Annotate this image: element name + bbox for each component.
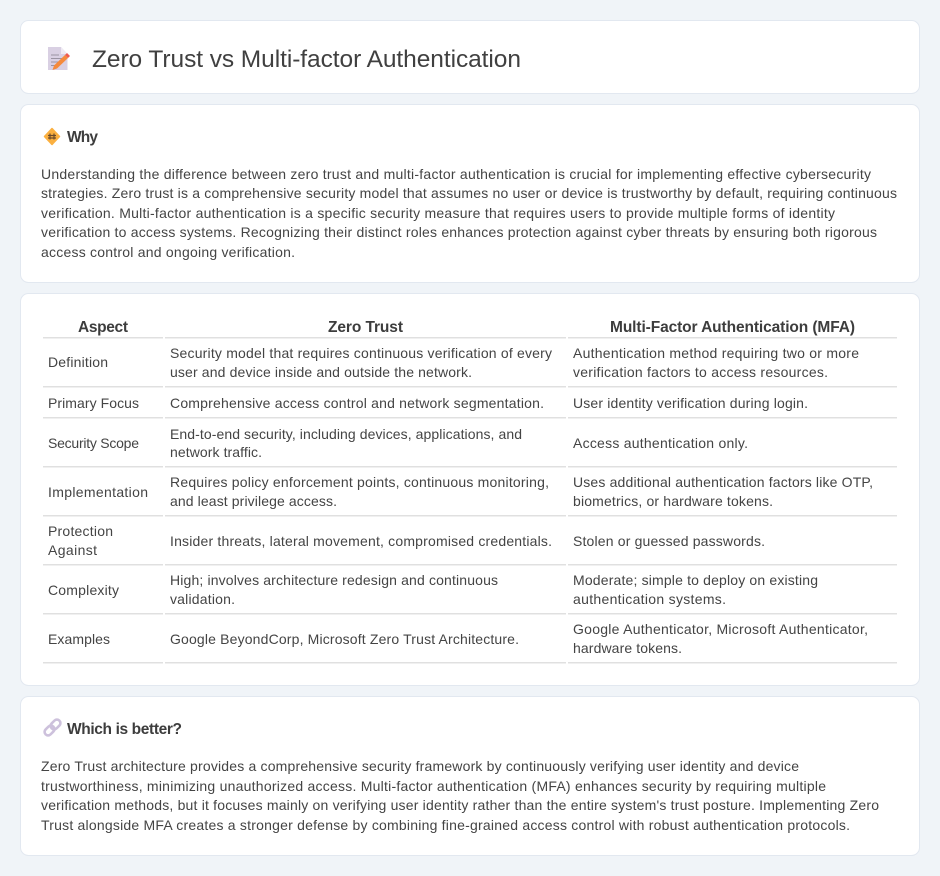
- row: definition: Security model that requires continuous verification of every: [170, 345, 552, 361]
- text block: which is better paragraph: [41, 758, 879, 833]
- row: implementation: [48, 474, 873, 509]
- text block: why paragraph: verification. Multi-factor authentication is a specific security measure that requires users to provide multiple forms of identity: [41, 205, 835, 221]
- row: primary focus: User identity verification during login.: [573, 395, 808, 411]
- row: examples: [48, 621, 868, 656]
- row: implementation: Requires policy enforcement points, continuous monitoring,: [170, 474, 549, 490]
- panel: why: [20, 104, 920, 282]
- table header row: Multi-Factor Authentication (MFA): [610, 319, 855, 336]
- row: protection against: Protection: [48, 523, 113, 539]
- icon: chain link: [43, 718, 62, 737]
- text block: why paragraph: Understanding the difference between zero trust and multi-factor authentication is crucial for implementing effective cybersecurity: [41, 166, 871, 182]
- row: complexity: High; involves architecture redesign and continuous: [170, 572, 498, 588]
- row: examples: Google Authenticator, Microsoft Authenticator,: [573, 621, 868, 637]
- row: protection against: Insider threats, lateral movement, compromised credentials.: [170, 533, 552, 549]
- row: primary focus: Primary Focus: [48, 395, 139, 411]
- table header row: Zero Trust: [328, 319, 403, 336]
- row: security scope: [48, 426, 748, 460]
- row: examples: Examples: [48, 631, 110, 647]
- row: examples: hardware tokens.: [573, 640, 682, 656]
- text block: why paragraph: [41, 166, 897, 260]
- row: definition: Definition: [48, 354, 108, 370]
- title: Zero Trust vs Multi-factor Authentication: [92, 46, 521, 73]
- text block: which is better paragraph: Zero Trust architecture provides a comprehensive security framework by continuously verifying user identity and device: [41, 758, 799, 774]
- row: complexity: validation.: [170, 591, 235, 607]
- row: examples: Google BeyondCorp, Microsoft Zero Trust Architecture.: [170, 631, 519, 647]
- heading: why: Why: [67, 129, 98, 146]
- row: definition: user and device inside and outside the network.: [170, 364, 472, 380]
- row: security scope: Access authentication only.: [573, 435, 748, 451]
- row: definition: Authentication method requiring two or more: [573, 345, 859, 361]
- heading: which is better: Which is better?: [67, 721, 182, 738]
- text block: which is better paragraph: verification methods, but it focuses mainly on verifying user identity rather than the entire system's trust posture. Implementing Zero: [41, 797, 879, 813]
- row: security scope: End-to-end security, including devices, applications, and: [170, 426, 522, 442]
- row: complexity: Moderate; simple to deploy on existing: [573, 572, 818, 588]
- panel: which is better: [20, 696, 920, 856]
- row: complexity: [48, 572, 818, 607]
- table header row: Aspect: [78, 319, 128, 336]
- row: implementation: Implementation: [48, 484, 148, 500]
- text block: why paragraph: strategies. Zero trust is a comprehensive security model that assumes no user or device is trustworthy by default, requiring continuous: [41, 185, 897, 201]
- row: primary focus: Comprehensive access control and network segmentation.: [170, 395, 544, 411]
- row: implementation: Uses additional authentication factors like OTP,: [573, 474, 873, 490]
- text block: why paragraph: verification to access systems. Recognizing their distinct roles enhances protection against cyber threats by ensuring both rigorous: [41, 224, 877, 240]
- row: security scope: network traffic.: [170, 444, 262, 460]
- panel: title header: [20, 20, 920, 94]
- text block: why paragraph: access control and ongoing verification.: [41, 244, 295, 260]
- row: complexity: authentication systems.: [573, 591, 726, 607]
- table header row: [78, 319, 855, 336]
- row: primary focus: [48, 395, 808, 411]
- text block: which is better paragraph: Trust alongside MFA creates a stronger defense by combining fine-grained access control with robust authentication protocols.: [41, 817, 850, 833]
- row: protection against: Against: [48, 542, 97, 558]
- row: protection against: Stolen or guessed passwords.: [573, 533, 765, 549]
- row: definition: verification factors to access resources.: [573, 364, 828, 380]
- row: implementation: and least privilege access.: [170, 493, 337, 509]
- row: implementation: biometrics, or hardware tokens.: [573, 493, 773, 509]
- icon: orange diamond sign: [44, 128, 60, 144]
- text block: which is better paragraph: trustworthiness, minimizing unauthorized access. Multi-factor authentication (MFA) enhances security by requiring multiple: [41, 778, 826, 794]
- row: security scope: Security Scope: [48, 435, 139, 451]
- row: complexity: Complexity: [48, 582, 119, 598]
- icon: memo with pencil: [48, 47, 70, 70]
- row: definition: [48, 345, 859, 380]
- panel: comparison table: [20, 294, 920, 686]
- row: protection against: [48, 523, 765, 558]
